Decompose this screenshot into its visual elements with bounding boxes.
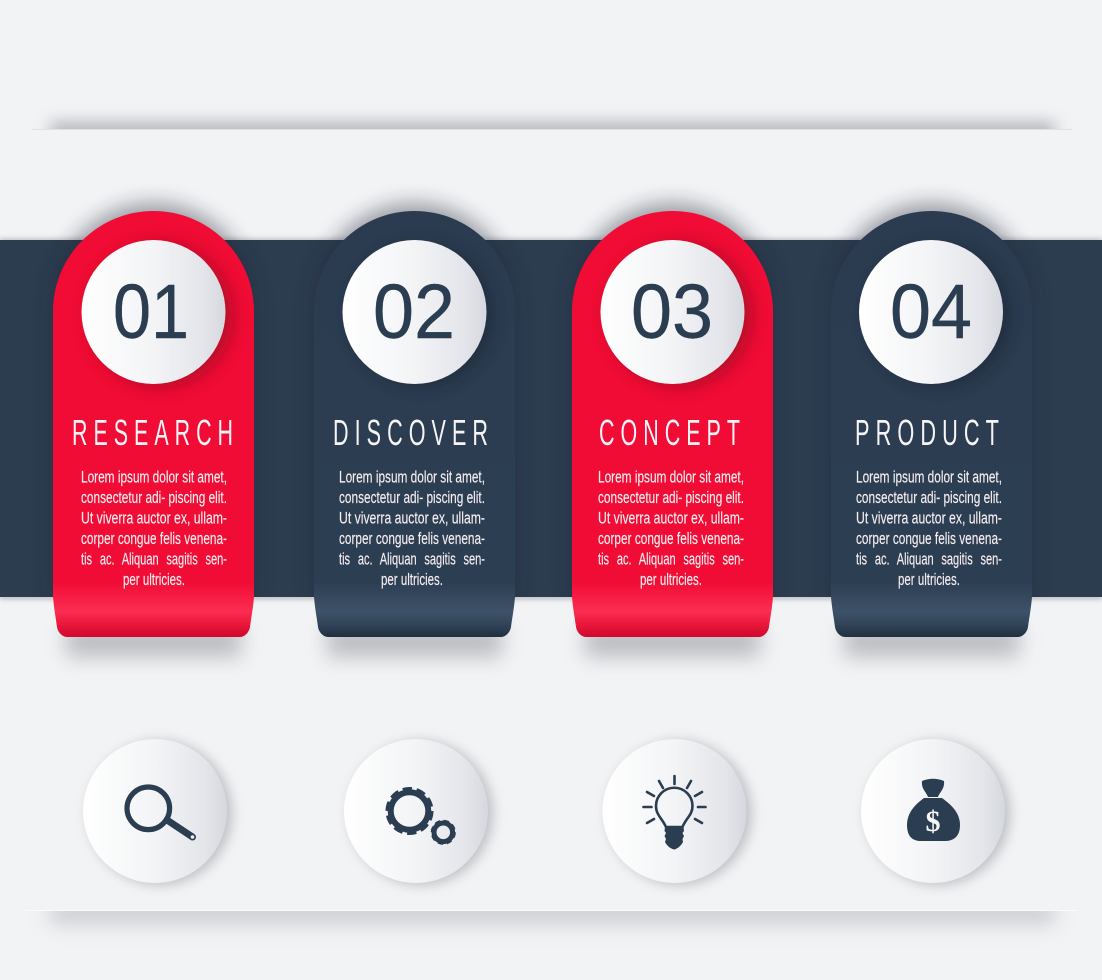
number: 02 (373, 269, 455, 355)
number circle shadow (89, 243, 233, 387)
body text: tis ac. Aliquan sagitis sen- (598, 550, 744, 568)
icon: magnifying glass (83, 739, 232, 885)
band soft shadow (0, 238, 1102, 600)
tab shape (53, 211, 254, 637)
body text: Ut viverra auctor ex, ullam- (81, 510, 227, 528)
number: 04 (890, 269, 972, 355)
panel: step 1 research (53, 203, 254, 657)
body text: Ut viverra auctor ex, ullam- (856, 510, 1002, 528)
panel: step 2 discover (314, 203, 515, 657)
tab shadow (60, 190, 247, 263)
body text: corper congue felis venena- (856, 530, 1002, 548)
heading: DISCOVER (333, 412, 494, 453)
lower tab shadow (844, 625, 1019, 657)
number circle (859, 240, 1003, 384)
number circle shadow (608, 243, 752, 387)
lower tab shadow (327, 625, 502, 657)
lower tab shadow (66, 625, 241, 657)
dark horizontal band (0, 240, 1102, 597)
panel: step 4 product (831, 203, 1032, 657)
body text: consectetur adi- piscing elit. (598, 489, 744, 507)
heading: RESEARCH (72, 412, 239, 453)
body text: tis ac. Aliquan sagitis sen- (339, 550, 485, 568)
body text: per ultricies. (123, 571, 185, 589)
body text (598, 468, 744, 589)
body text: tis ac. Aliquan sagitis sen- (856, 550, 1002, 568)
body text: Lorem ipsum dolor sit amet, (339, 468, 485, 486)
tab shape (314, 211, 515, 637)
number circle shadow (350, 243, 494, 387)
heading: CONCEPT (599, 412, 746, 453)
tab shadow (579, 190, 766, 263)
tab shape (572, 211, 773, 637)
body text: per ultricies. (381, 571, 443, 589)
body text: corper congue felis venena- (598, 530, 744, 548)
body text: per ultricies. (898, 571, 960, 589)
body text (339, 468, 485, 589)
body text (856, 468, 1002, 589)
lower tab shadow (585, 625, 760, 657)
tab shadow (838, 190, 1025, 263)
tab shadow (321, 190, 508, 263)
top edge shadow (32, 114, 1072, 130)
body text: Lorem ipsum dolor sit amet, (81, 468, 227, 486)
number circle (82, 240, 226, 384)
body text: consectetur adi- piscing elit. (856, 489, 1002, 507)
number circle (600, 240, 744, 384)
tab shape (831, 211, 1032, 637)
icon: money bag (861, 739, 1010, 885)
icon: gears (344, 739, 493, 885)
icon: light bulb (602, 739, 752, 885)
icon: money bag: $ (926, 805, 940, 838)
number: 01 (113, 269, 189, 355)
body text (81, 468, 227, 589)
number circle shadow (867, 243, 1011, 387)
body text: consectetur adi- piscing elit. (339, 489, 485, 507)
body text: Ut viverra auctor ex, ullam- (598, 510, 744, 528)
body text: Ut viverra auctor ex, ullam- (339, 510, 485, 528)
number circle (342, 240, 486, 384)
body text: corper congue felis venena- (81, 530, 227, 548)
heading: PRODUCT (855, 412, 1005, 453)
number: 03 (631, 269, 713, 355)
body text: Lorem ipsum dolor sit amet, (856, 468, 1002, 486)
body text: corper congue felis venena- (339, 530, 485, 548)
body text: per ultricies. (640, 571, 702, 589)
panel: step 3 concept (572, 203, 773, 657)
body text: consectetur adi- piscing elit. (81, 489, 227, 507)
body text: tis ac. Aliquan sagitis sen- (81, 550, 227, 568)
body text: Lorem ipsum dolor sit amet, (598, 468, 744, 486)
bottom edge shadow (24, 900, 1076, 924)
